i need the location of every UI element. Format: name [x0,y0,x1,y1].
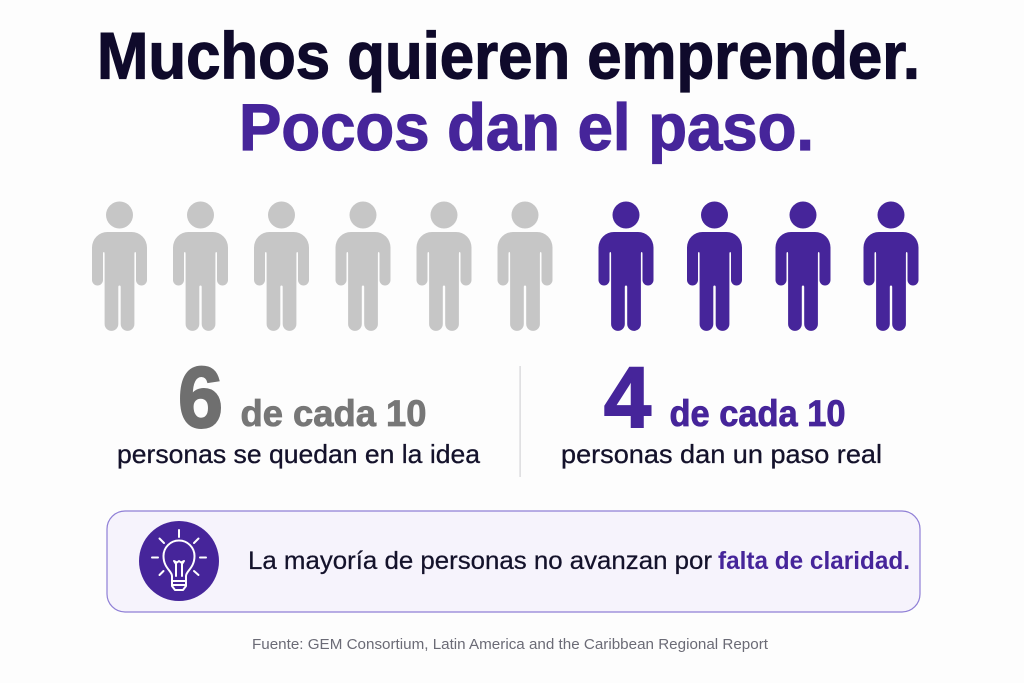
callout text [248,547,910,575]
statistic: 6 de cada 10 [117,350,481,469]
divider [520,366,521,477]
statistic: 4 de cada 10: de cada 10 [670,393,846,434]
statistic: 4 de cada 10: personas dan un paso real [561,439,882,469]
title [97,18,920,164]
pictogram: 6 gray people [92,202,552,331]
callout panel [107,511,920,612]
statistic: 6 de cada 10: 6 [178,350,223,446]
statistic: 4 de cada 10: 4 [604,350,651,446]
title: Muchos quieren emprender. [97,18,920,92]
title: Pocos dan el paso. [239,90,814,164]
statistic: 4 de cada 10 [561,350,882,469]
icon: light bulb [139,521,219,601]
source footnote: Fuente: GEM Consortium, Latin America and the Caribbean Regional Report [252,637,768,653]
statistic: 6 de cada 10: de cada 10 [240,393,426,434]
callout text: falta de claridad. [718,547,910,575]
pictogram: 4 purple people [598,202,918,331]
callout text: La mayoría de personas no avanzan por [248,547,712,575]
statistic: 6 de cada 10: personas se quedan en la idea [117,439,481,469]
